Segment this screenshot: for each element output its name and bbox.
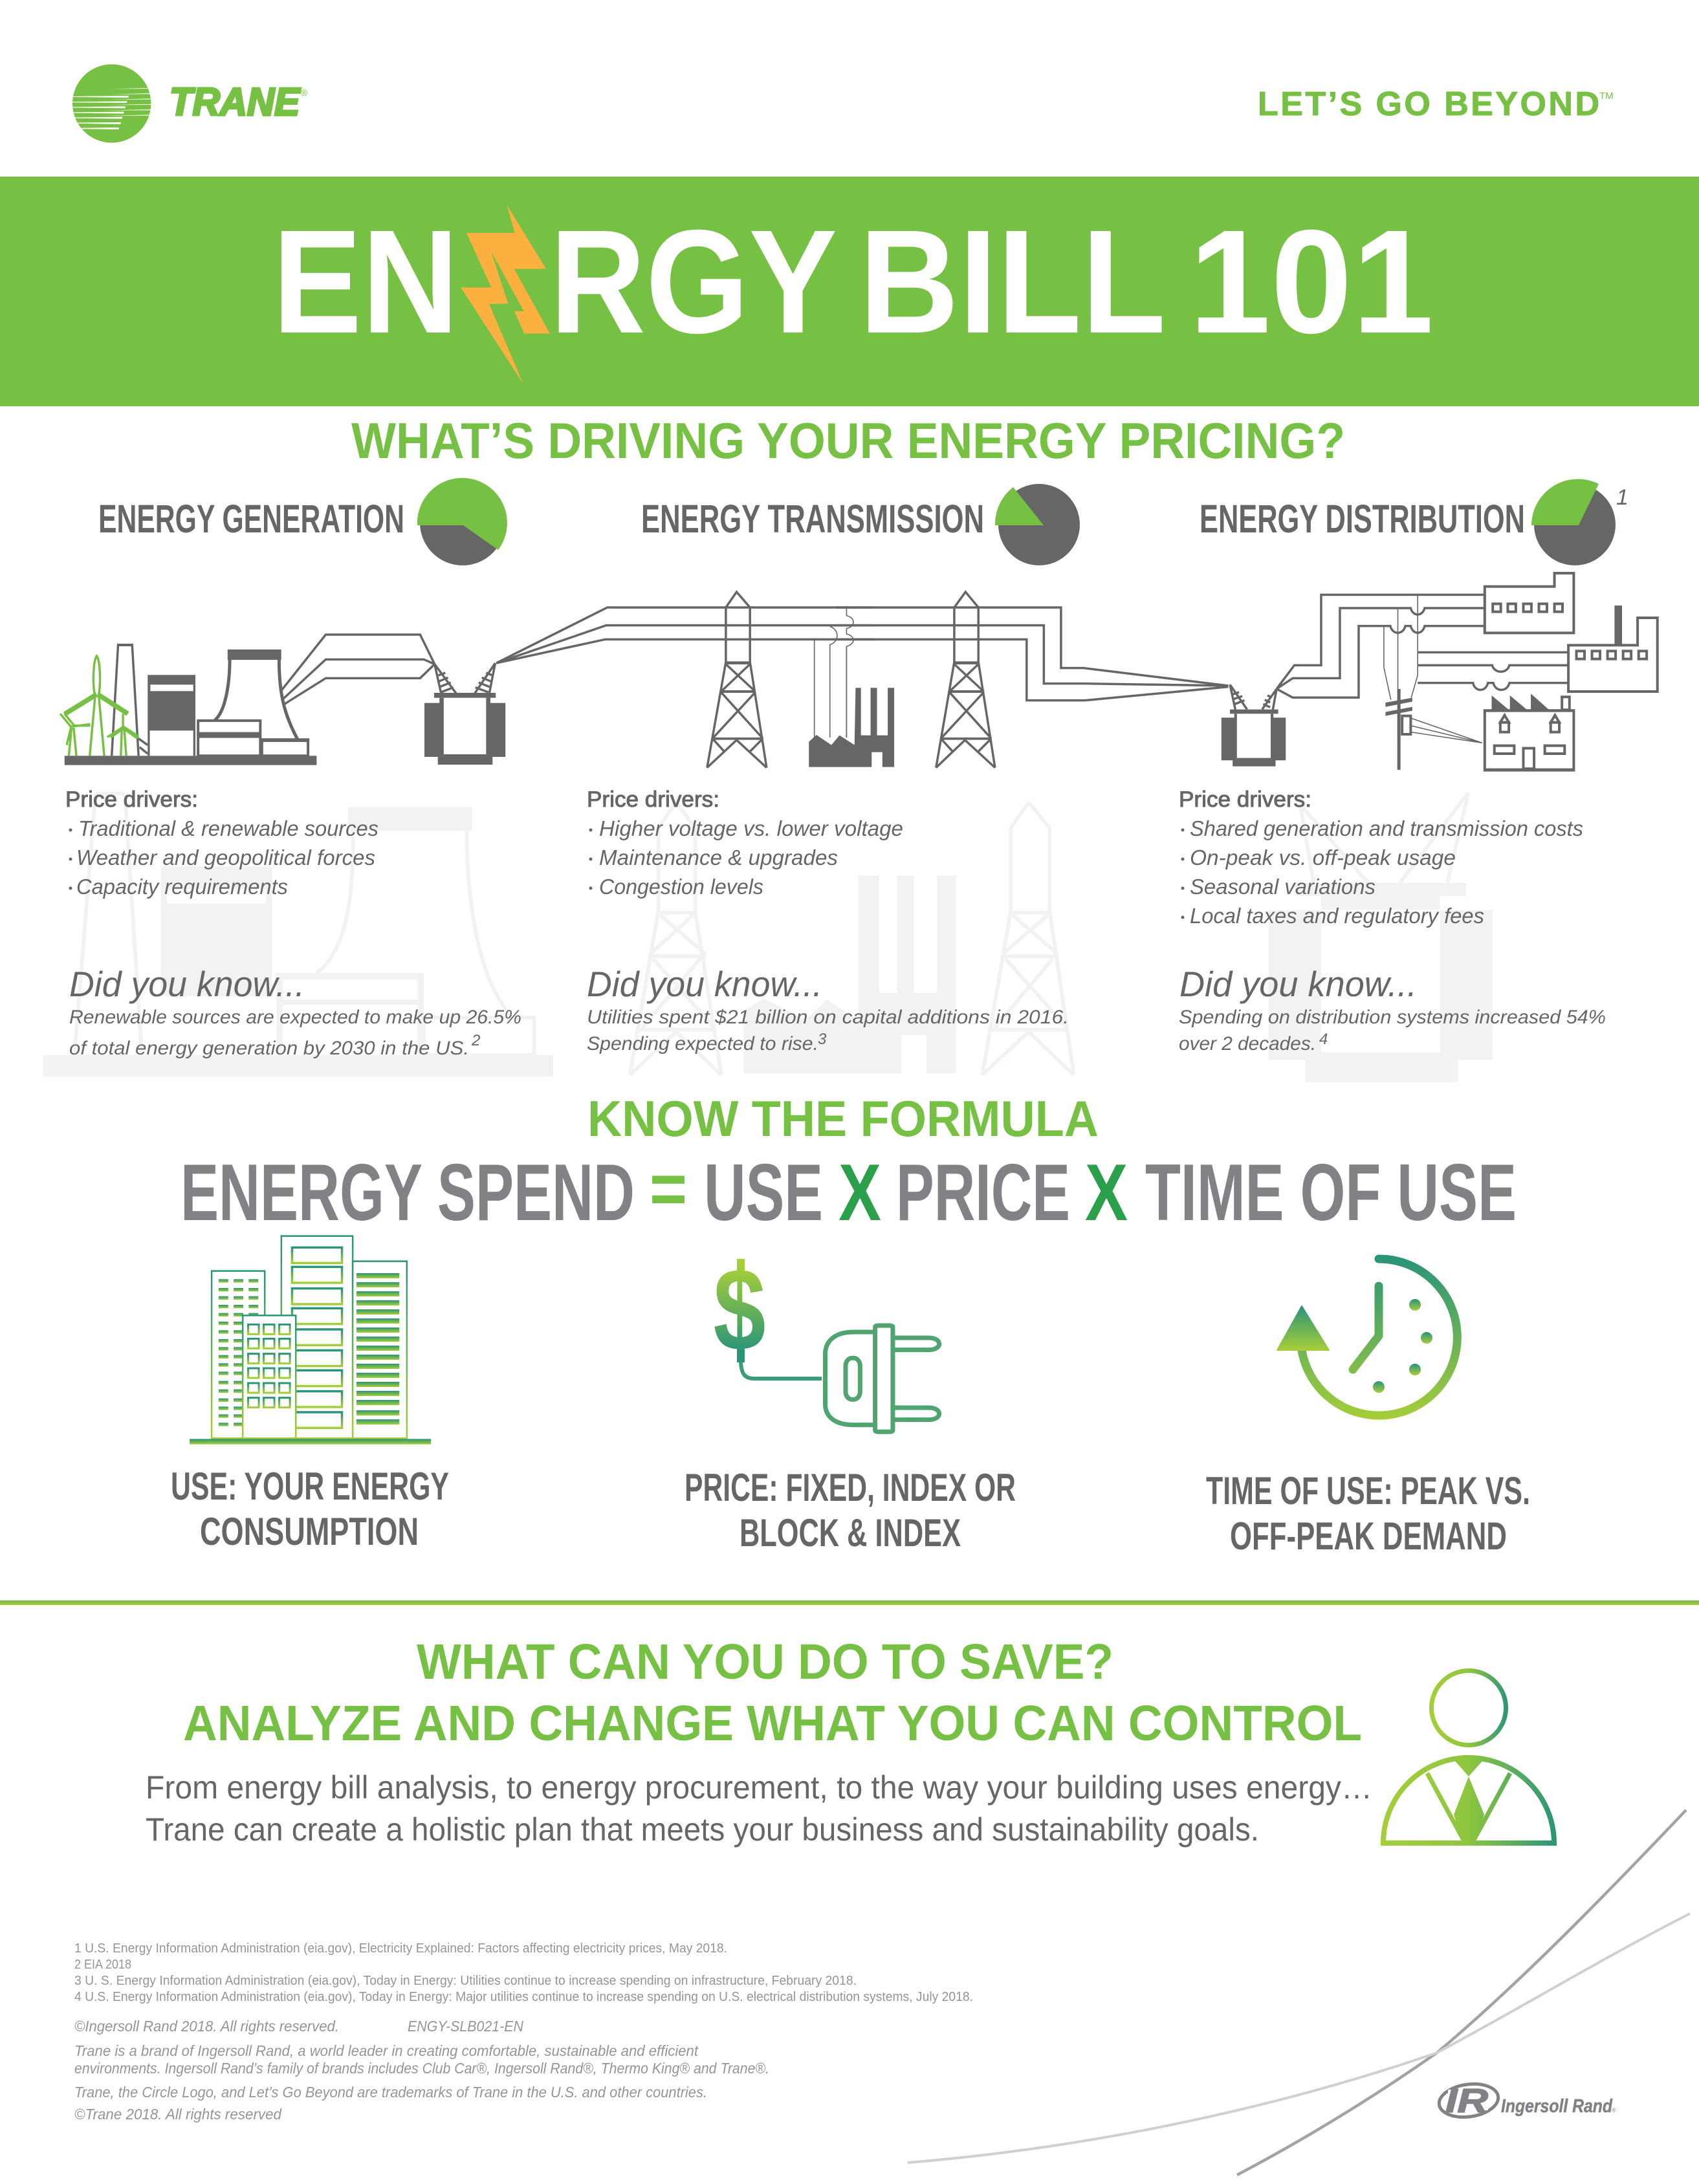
panel text: distribution drivers: Price drivers: [1179,787,1311,812]
legal text: Trane, the Circle Logo, and Let’s Go Beyond are trademarks of Trane in the U.S. and other countries. [74,2084,707,2101]
did you know: transmission [587,964,1069,1054]
title text: BILL [859,200,1166,364]
panel heading: energy transmission with pie [641,484,1080,565]
logo: Trane [71,64,308,143]
panel text: distribution drivers: Seasonal variations [1190,875,1376,899]
transmission tower [707,592,767,768]
did you know: distribution [1179,964,1606,1054]
distribution wires [1277,595,1485,697]
title text [272,200,1434,364]
did you know: generation: 2 [471,1032,480,1049]
logo: Ingersoll Rand: Ingersoll Rand [1501,2096,1613,2117]
illustration: power plant, wires and first tower [60,592,873,768]
panel heading: energy distribution with pie [1200,479,1628,565]
panel text: generation drivers: Traditional & renewable sources [78,816,378,840]
caption: use [171,1465,449,1553]
caption: price [685,1466,1016,1555]
heading: know the formula: KNOW THE FORMULA [587,1090,1099,1147]
legal text: environments. Ingersoll Rand’s family of brands includes Club Car®, Ingersoll Rand®, Thermo King® and Trane®. [74,2060,769,2077]
formula: X [839,1148,881,1238]
legal text [74,2018,769,2123]
panel text: generation drivers: Price drivers: [65,787,198,812]
did you know: transmission: 3 [818,1031,827,1048]
utility pole [1385,689,1482,770]
panel text: transmission drivers: Price drivers: [587,787,719,812]
heading: what's driving your energy pricing: WHAT’S DRIVING YOUR ENERGY PRICING? [351,412,1345,469]
title text: RGY [550,200,837,364]
did you know: transmission: Spending expected to rise. [587,1033,818,1054]
power plant [65,644,316,765]
customer: house [1484,693,1574,771]
customer: building two [1418,606,1658,692]
did you know: generation: Renewable sources are expected to make up 26.5% [69,1007,521,1028]
tagline: Let's Go Beyond: LET’S GO BEYOND [1258,85,1599,123]
formula: ENERGY SPEND [181,1148,635,1238]
title banner [0,177,1699,406]
footnotes [74,1941,973,2004]
logo: Ingersoll Rand: ® [1612,2107,1616,2113]
formula: = [650,1148,687,1229]
caption: time of use: TIME OF USE: PEAK VS. [1206,1469,1530,1512]
generator wires [281,635,435,704]
panel text: transmission drivers: Congestion levels [599,875,763,899]
did you know: transmission: Did you know... [587,964,822,1004]
factory [809,688,894,767]
caption: time of use: OFF-PEAK DEMAND [1230,1514,1507,1558]
panel heading: energy transmission with pie: ENERGY TRANSMISSION [641,497,984,541]
panel heading: energy generation with pie [98,478,507,565]
panel text: transmission drivers [587,787,903,899]
section divider [0,1600,1699,1605]
tagline: Let's Go Beyond: TM [1599,91,1614,102]
panel text: distribution drivers [1179,787,1583,928]
formula: PRICE [896,1148,1070,1238]
did you know: distribution: Spending on distribution systems increased 54% [1179,1007,1606,1028]
logo: Ingersoll Rand: IR [1445,2082,1489,2120]
did you know: distribution: Did you know... [1179,964,1417,1004]
formula [181,1148,1517,1238]
logo: Trane: ® [301,87,308,98]
footnotes: 2 EIA 2018 [74,1958,131,1972]
legal text: ENGY-SLB021-EN [408,2018,523,2035]
formula: USE [704,1148,823,1238]
panel text: generation drivers [65,787,378,899]
icon: person [1383,1670,1554,1843]
title text: 101 [1189,200,1434,364]
caption: price: PRICE: FIXED, INDEX OR [685,1466,1016,1509]
text block: holistic plan: From energy bill analysis, to energy procurement, to the way your building uses energy… [146,1769,1372,1806]
icon: buildings [190,1236,431,1445]
transmission wires [496,607,873,663]
icon: dollar plug: $ [714,1243,765,1375]
background ghost illustration [43,792,1493,1082]
icon: clock [1277,1259,1457,1415]
step-up transformer [424,663,505,765]
factory feed lines [815,607,853,737]
panel text: generation drivers: Weather and geopolitical forces [76,846,375,869]
logo: Ingersoll Rand [1437,2080,1616,2121]
wind turbines [60,656,138,756]
panel text: generation drivers: Capacity requirements [76,875,288,899]
did you know: distribution: 4 [1319,1031,1328,1048]
logo: Trane: TRANE [170,80,301,124]
panel heading: energy distribution with pie: ENERGY DISTRIBUTION [1200,497,1525,541]
transmission tower two [936,592,995,768]
panel text: transmission drivers: Higher voltage vs. lower voltage [599,816,903,840]
did you know: transmission: Utilities spent $21 billion on capital additions in 2016. [587,1007,1069,1028]
footnotes: 3 U. S. Energy Information Administration (eia.gov), Today in Energy: Utilities continue to increase spending on infrastructure, February 2018. [74,1974,857,1988]
wires to substation [836,607,1229,701]
panel text: distribution drivers: Local taxes and regulatory fees [1190,904,1484,928]
formula: TIME OF USE [1145,1148,1517,1238]
text block: holistic plan [146,1769,1372,1848]
heading: what can you do to save [183,1634,1362,1751]
did you know: generation: Did you know... [69,964,305,1004]
footnotes: 4 U.S. Energy Information Administration (eia.gov), Today in Energy: Major utilities continue to increase spending on U.S. electrical distribution systems, July 2018. [74,1990,973,2004]
panel text: distribution drivers: On-peak vs. off-peak usage [1190,846,1456,869]
icon: lightning bolt [461,205,550,384]
caption: use: CONSUMPTION [200,1510,419,1553]
heading: what can you do to save: ANALYZE AND CHANGE WHAT YOU CAN CONTROL [183,1696,1362,1751]
distribution transformer [1222,684,1286,767]
footnotes: 1 U.S. Energy Information Administration (eia.gov), Electricity Explained: Factors affecting electricity prices, May 2018. [74,1941,727,1956]
heading: what can you do to save: WHAT CAN YOU DO TO SAVE? [417,1634,1113,1690]
title text: EN [272,200,459,364]
panel text: transmission drivers: Maintenance & upgrades [599,846,838,869]
legal text: Trane is a brand of Ingersoll Rand, a world leader in creating comfortable, sustainable and efficient [74,2042,699,2059]
icon: dollar plug [714,1243,939,1432]
legal text: ©Trane 2018. All rights reserved [74,2106,282,2123]
caption: time of use [1206,1469,1530,1558]
customer: building one [1485,573,1573,633]
text block: holistic plan: Trane can create a holistic plan that meets your business and sustainability goals. [146,1811,1259,1848]
formula: X [1085,1148,1128,1238]
panel heading: energy distribution with pie: 1 [1616,485,1628,510]
caption: use: USE: YOUR ENERGY [171,1465,449,1508]
did you know: distribution: over 2 decades. [1179,1033,1316,1054]
did you know: generation: of total energy generation by 2030 in the US. [69,1038,469,1059]
caption: price: BLOCK & INDEX [740,1511,961,1555]
did you know: generation [69,964,521,1059]
legal text: ©Ingersoll Rand 2018. All rights reserved. [74,2018,339,2035]
decorative curve: light [908,1914,1690,2163]
illustration: factory, tower two, substation and customers [809,573,1658,771]
panel heading: energy generation with pie: ENERGY GENERATION [98,497,404,541]
panel text: distribution drivers: Shared generation and transmission costs [1190,816,1583,840]
decorative curve: dark [1237,1810,1686,2175]
